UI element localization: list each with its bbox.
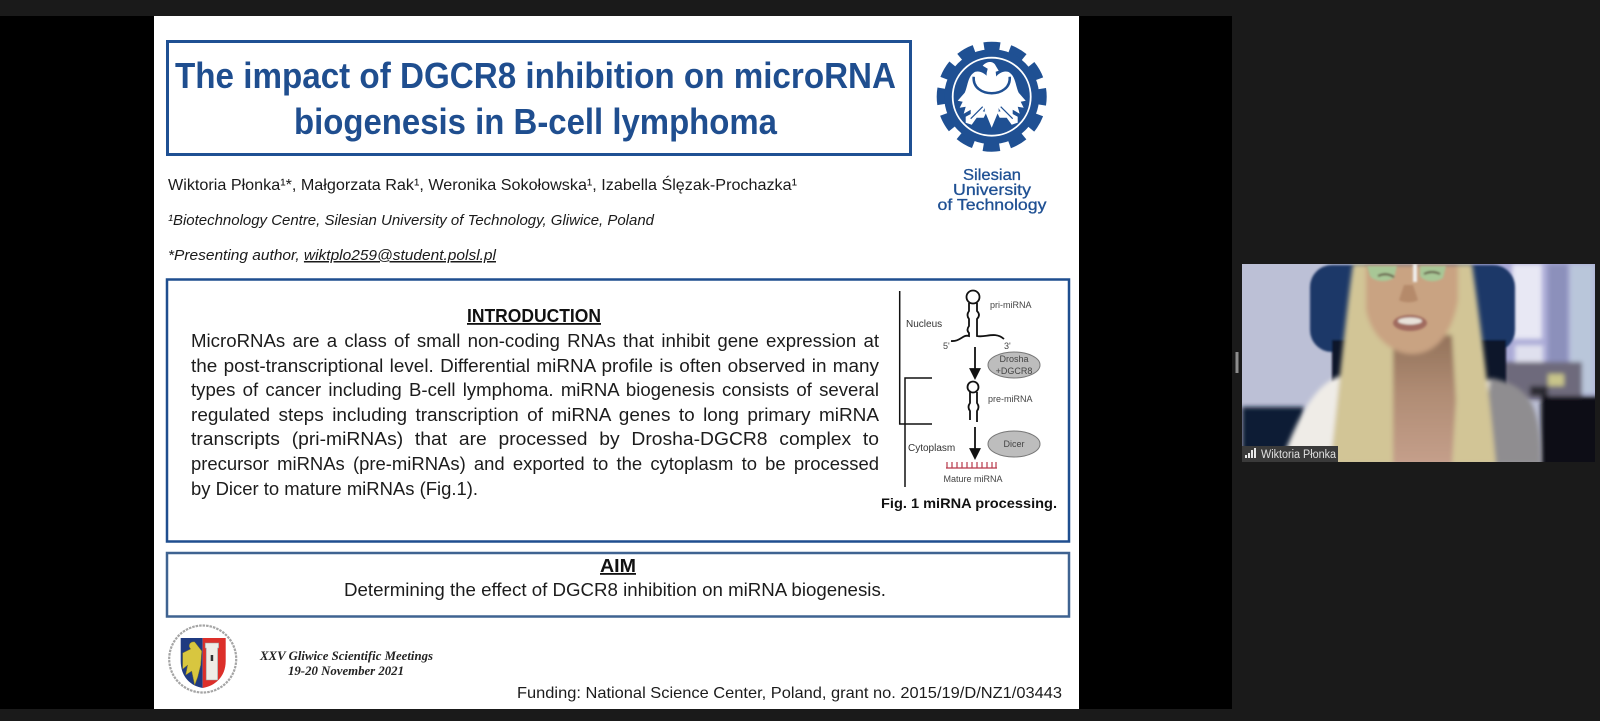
plant [1500, 362, 1582, 400]
Drosha DGCR8 ellipse: +DGCR8 [996, 366, 1032, 376]
label: cytoplasm: Cytoplasm [908, 443, 955, 454]
slide [154, 16, 1079, 709]
logo wordmark: Silesian [963, 167, 1021, 184]
presenting author: *Presenting author, wiktplo259@student.polsl.pl [168, 247, 497, 264]
figure: miRNA processing diagram [900, 290, 1040, 487]
glasses [1367, 264, 1446, 331]
speaker video [1242, 264, 1600, 468]
label: 3 prime: 3' [1004, 341, 1011, 351]
mouth [1393, 315, 1427, 331]
logo wordmark: University [953, 182, 1031, 199]
pri-miRNA hairpin [951, 290, 1004, 341]
introduction text: precursor miRNAs (pre-miRNAs) and exported to the cytoplasm to be processed [191, 454, 879, 474]
nose [1399, 285, 1418, 302]
mature miRNA duplex [946, 462, 997, 468]
heading: introduction: INTRODUCTION [467, 306, 601, 326]
arrow: pre to mature [970, 427, 980, 458]
Drosha DGCR8 ellipse [988, 352, 1040, 378]
hair [1330, 264, 1496, 465]
introduction text: transcripts (pri-miRNAs) that are processed by Drosha-DGCR8 complex to [191, 429, 879, 449]
label: nucleus: Nucleus [906, 319, 942, 330]
introduction text [191, 331, 879, 499]
panel divider handle [1236, 352, 1238, 373]
authors: Wiktoria Płonka¹*, Małgorzata Rak¹, Weronika Sokołowska¹, Izabella Ślęzak-Prochazka¹ [168, 175, 797, 194]
name label [1242, 446, 1338, 462]
icon: Gliwice coat of arms [169, 626, 236, 692]
funding: Funding: National Science Center, Poland, grant no. 2015/19/D/NZ1/03443 [517, 685, 1062, 702]
speaker name: Wiktoria Płonka [1261, 449, 1337, 461]
aim text: Determining the effect of DGCR8 inhibition on miRNA biogenesis. [344, 580, 886, 600]
conference name: XXV Gliwice Scientific Meetings [259, 649, 433, 663]
figure caption: Fig. 1 miRNA processing. [881, 495, 1057, 511]
Dicer ellipse [988, 431, 1040, 457]
affiliation: ¹Biotechnology Centre, Silesian University of Technology, Gliwice, Poland [168, 212, 655, 229]
label: 5 prime: 5' [943, 341, 950, 351]
introduction text: the post-transcriptional level. Differential miRNA profile is often observed in many [191, 356, 879, 376]
heading: aim: AIM [600, 556, 636, 576]
icon: signal bars [1245, 448, 1256, 458]
label: pre-miRNA: pre-miRNA [988, 394, 1033, 404]
white top [1283, 373, 1494, 446]
university logo [938, 46, 1046, 214]
cardigan [1480, 378, 1541, 465]
label: pri-miRNA: pri-miRNA [990, 300, 1032, 310]
face [1366, 264, 1458, 354]
introduction text: MicroRNAs are a class of small non-coding RNAs that inhibit gene expression at [191, 331, 879, 351]
Dicer ellipse: Dicer [1003, 439, 1025, 449]
Drosha DGCR8 ellipse: Drosha [999, 354, 1029, 364]
window [1470, 264, 1595, 399]
title box [168, 42, 910, 154]
conference date: 19-20 November 2021 [288, 664, 404, 678]
title line 2: biogenesis in B-cell lymphoma [294, 101, 778, 142]
panel: introduction [167, 280, 1069, 542]
title line 1: The impact of DGCR8 inhibition on microRNA [175, 55, 896, 96]
neck and chest [1393, 335, 1456, 465]
introduction text: types of cancer including B-cell lymphoma. miRNA biogenesis consists of several [191, 380, 879, 400]
label: mature miRNA: Mature miRNA [943, 474, 1003, 484]
arrow: pri to pre [970, 347, 980, 378]
pre-miRNA hairpin [968, 382, 978, 422]
icon: gear emblem [941, 46, 1043, 148]
logo wordmark [938, 167, 1046, 214]
introduction text: regulated steps including transcription of miRNA genes to long primary miRNA [191, 405, 879, 425]
panel: aim [167, 553, 1069, 616]
logo wordmark: of Technology [938, 197, 1046, 214]
chair [1310, 265, 1515, 390]
introduction text: by Dicer to mature miRNAs (Fig.1). [191, 479, 478, 499]
